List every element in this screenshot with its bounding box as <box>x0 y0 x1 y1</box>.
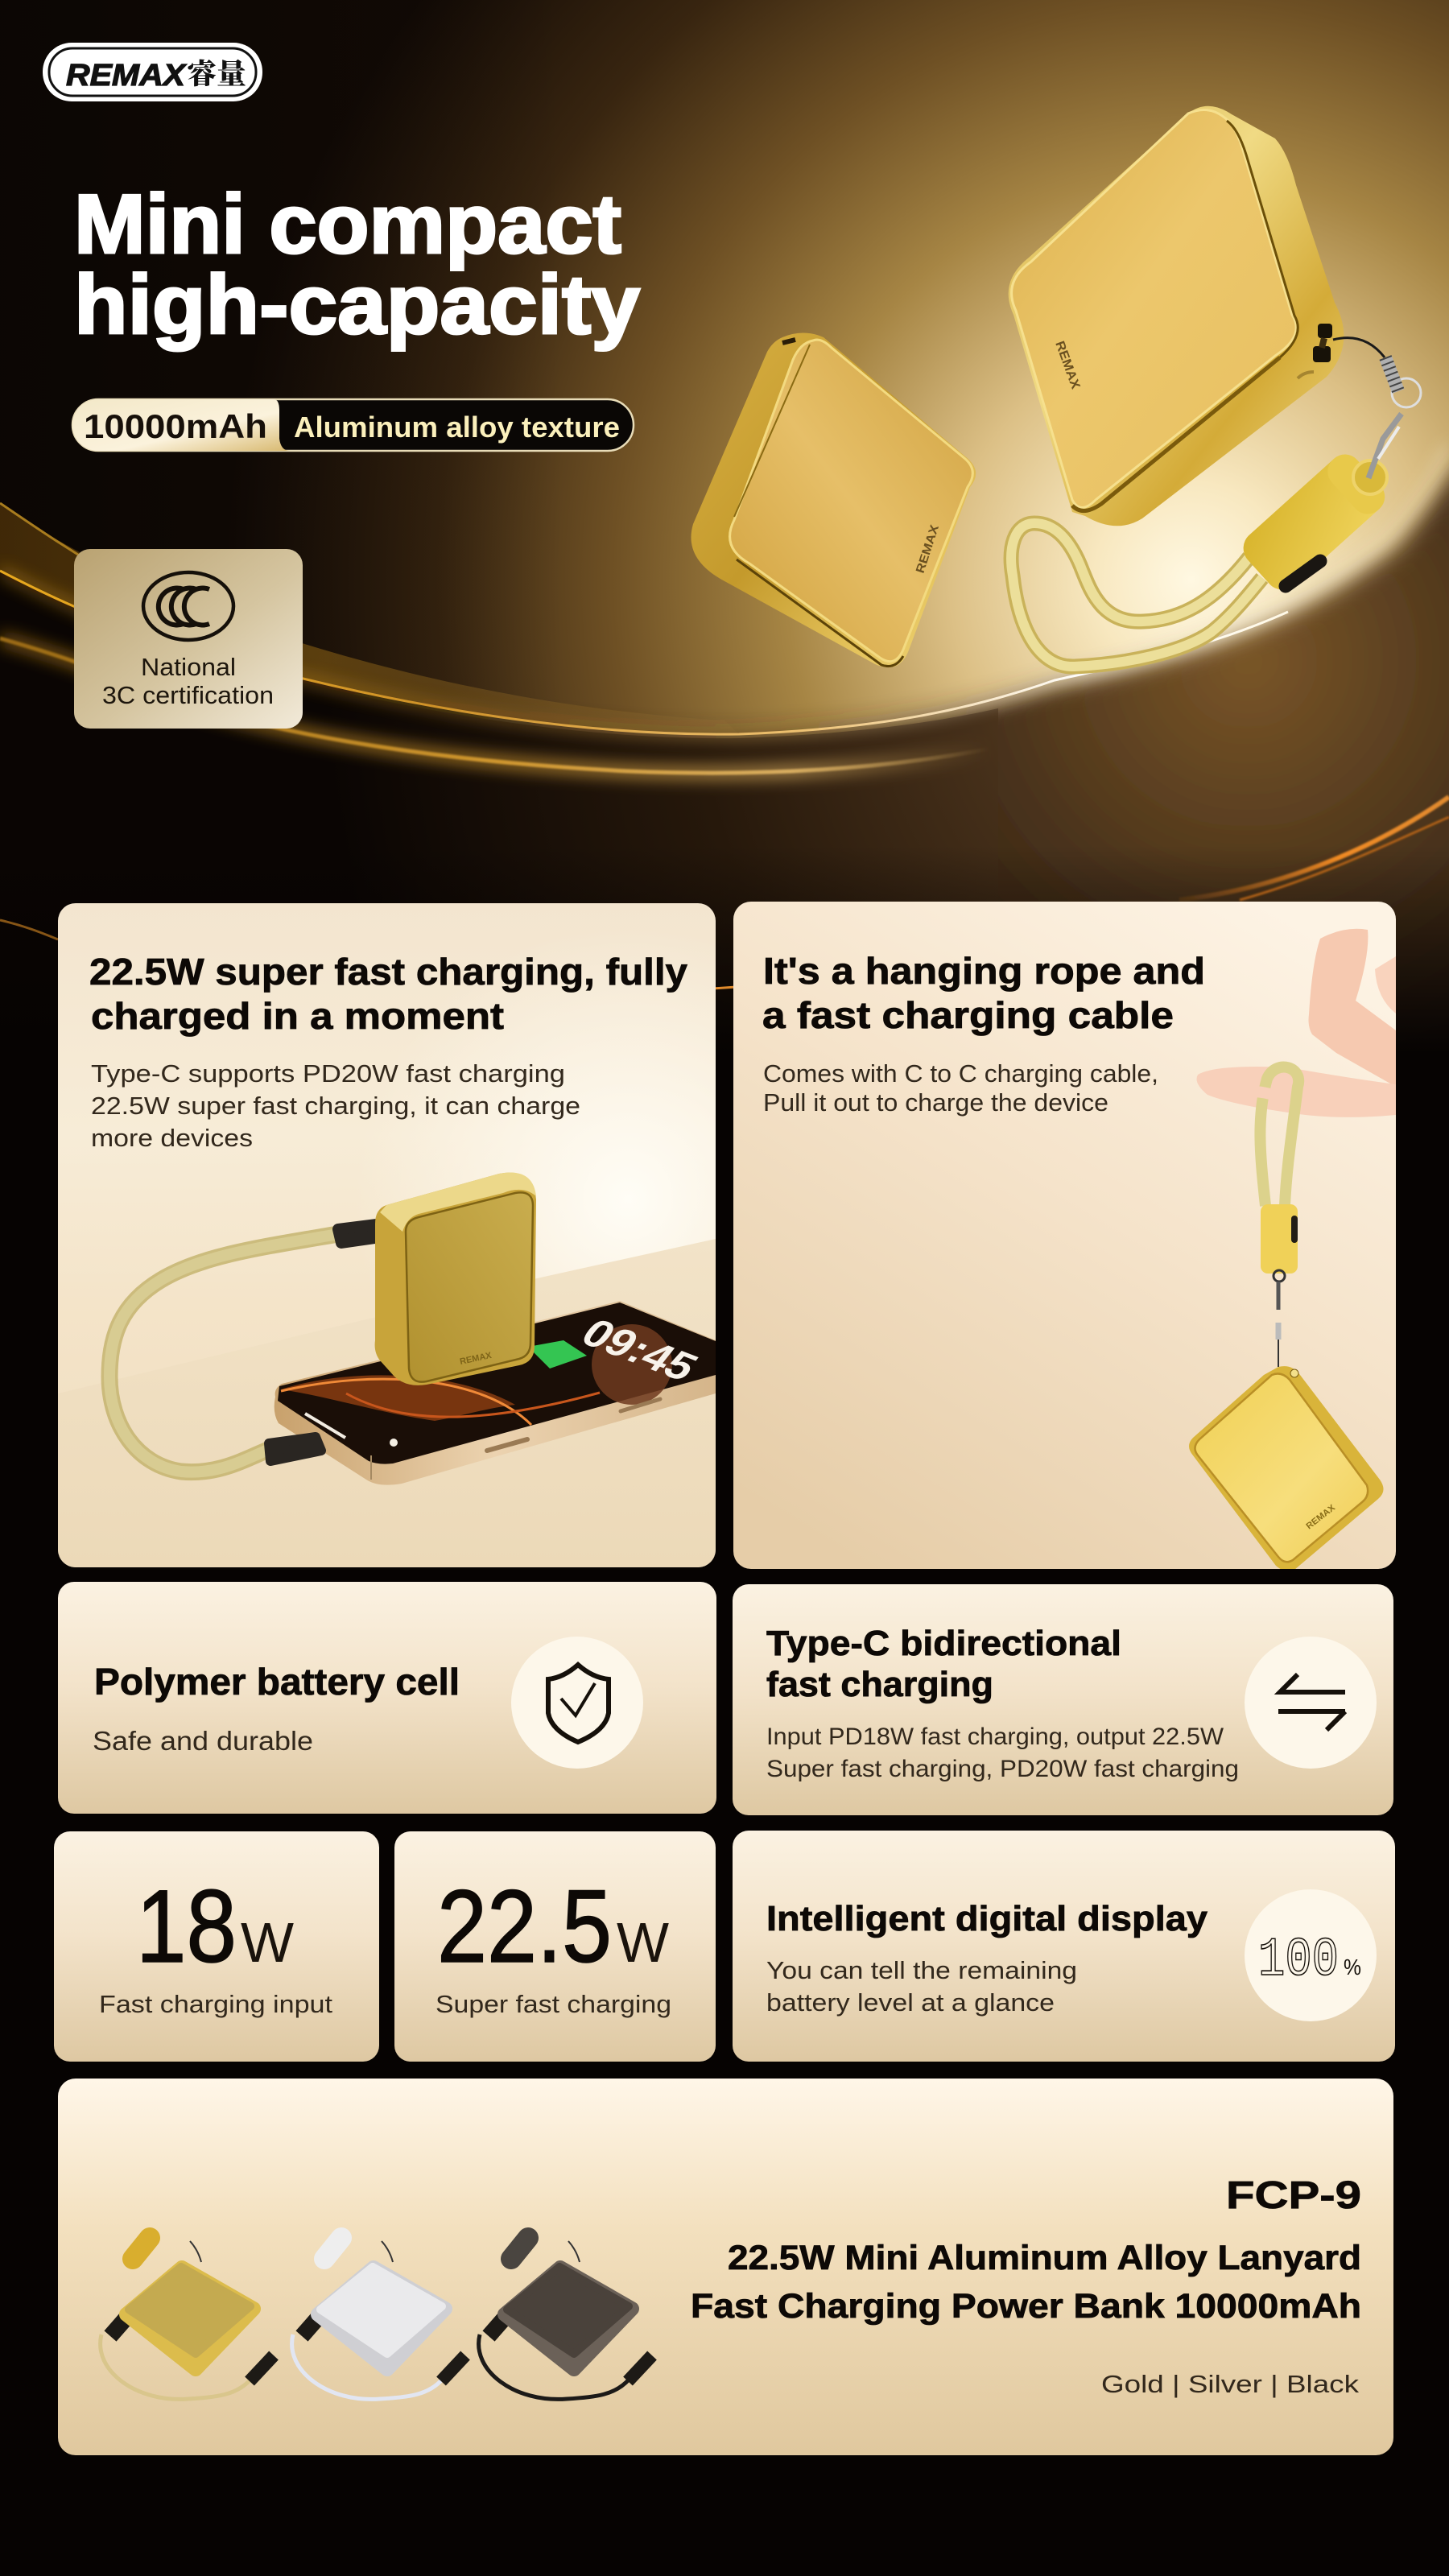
panel: 22.5W output: 22.5 <box>437 1869 612 1984</box>
panel: hanging rope and cable: Pull it out to charge the device <box>763 1088 1108 1117</box>
panel: model and colours <box>58 2079 1393 2455</box>
icon: 100 percent display: % <box>1344 1955 1361 1979</box>
panel: 18W input: Fast charging input <box>99 1990 332 2018</box>
light ribbons <box>0 446 1449 989</box>
badge: national 3C certification: 3C certification <box>102 681 274 709</box>
panel: polymer battery cell: Polymer battery cell <box>94 1661 460 1703</box>
panel: type-C bidirectional <box>733 1584 1393 1815</box>
hand <box>1196 929 1396 1117</box>
panel: 18W input: 18 <box>136 1869 237 1984</box>
panel: 18W input: W <box>241 1911 294 1974</box>
product: silver colourway <box>292 2238 465 2399</box>
lanyard <box>1260 1067 1298 1206</box>
brand mark: REMAX <box>914 523 942 575</box>
panel: polymer battery cell: Safe and durable <box>93 1726 313 1756</box>
product: charging cable lanyard <box>1011 357 1421 667</box>
logo: REMAX <box>43 43 262 101</box>
hanging power bank: REMAX <box>1304 1503 1337 1531</box>
panel: type-C bidirectional: Input PD18W fast charging, output 22.5W <box>766 1724 1224 1750</box>
logo: REMAX: REMAX <box>66 59 188 93</box>
panel: hanging rope and cable <box>733 902 1396 1571</box>
panel: 22.5W output: Super fast charging <box>436 1990 671 2018</box>
logo: REMAX: 睿量 <box>187 52 246 93</box>
panel: 18W input <box>54 1831 379 2062</box>
title: Mini compact <box>74 178 621 271</box>
power bank <box>375 1173 536 1385</box>
panel: polymer battery cell <box>58 1582 716 1814</box>
panel: 22.5W super fast charging: 22.5W super fast charging, it can charge <box>91 1092 580 1120</box>
port <box>782 340 795 343</box>
panel: 22.5W super fast charging: charged in a moment <box>91 995 504 1037</box>
panel: type-C bidirectional: Super fast charging, PD20W fast charging <box>766 1756 1239 1782</box>
icon: 100 percent display <box>1245 1889 1377 2021</box>
badge: national 3C certification <box>74 549 303 729</box>
power bank: REMAX <box>459 1351 493 1367</box>
phone clock: 09:45 <box>572 1311 707 1389</box>
panel: model and colours: 22.5W Mini Aluminum Alloy Lanyard <box>728 2239 1361 2277</box>
panel: type-C bidirectional: Type-C bidirectional <box>766 1624 1121 1663</box>
panel: 22.5W super fast charging <box>58 903 716 1567</box>
panel: intelligent digital display <box>733 1831 1395 2062</box>
capacity and material pill: 10000mAh <box>84 407 267 445</box>
icon: bidirectional arrows <box>1245 1637 1377 1769</box>
panel: intelligent digital display: You can tell the remaining <box>766 1956 1077 1984</box>
panel: model and colours: Fast Charging Power Bank 10000mAh <box>691 2287 1361 2326</box>
panel: hanging rope and cable: It's a hanging rope and <box>763 950 1205 992</box>
product: large power bank <box>1009 106 1385 526</box>
panel: intelligent digital display: battery level at a glance <box>766 1988 1055 2017</box>
panel: model and colours: Gold | Silver | Black <box>1101 2370 1360 2398</box>
illustration: hand holding lanyard <box>1189 929 1396 1571</box>
product: small power bank <box>691 333 976 667</box>
icon: shield with check <box>511 1637 643 1769</box>
connector: top <box>338 1222 398 1243</box>
illustration: power bank charging phone <box>58 997 716 1567</box>
panel: 22.5W super fast charging: 22.5W super fast charging, fully <box>89 951 687 993</box>
phone <box>275 1301 716 1485</box>
panel: intelligent digital display: Intelligent digital display <box>766 1899 1208 1938</box>
panel: 22.5W output: W <box>617 1911 669 1974</box>
panel: 22.5W output <box>394 1831 716 2062</box>
panel: 22.5W super fast charging: more devices <box>91 1124 253 1152</box>
capacity and material pill <box>72 399 634 451</box>
badge: national 3C certification: National <box>141 653 236 681</box>
connector: bottom <box>269 1437 321 1461</box>
retractable cable <box>109 1234 338 1472</box>
title: high-capacity <box>74 258 640 352</box>
panel: type-C bidirectional: fast charging <box>766 1665 993 1704</box>
icon: 100 percent display: 100 <box>1258 1930 1339 1992</box>
hanging power bank <box>1189 1366 1384 1571</box>
capacity and material pill: Aluminum alloy texture <box>294 411 620 444</box>
product: black colourway <box>479 2238 652 2399</box>
panel: 22.5W super fast charging: Type-C supports PD20W fast charging <box>91 1059 565 1088</box>
ports and wire <box>1298 324 1385 378</box>
icon: CCC mark <box>143 572 233 640</box>
product: gold colourway <box>101 2238 274 2399</box>
title <box>74 178 640 352</box>
panel: hanging rope and cable: Comes with C to C charging cable, <box>763 1059 1158 1088</box>
product: large power bank: REMAX <box>1052 340 1083 391</box>
panel: model and colours: FCP-9 <box>1226 2174 1361 2217</box>
panel: hanging rope and cable: a fast charging cable <box>762 994 1174 1036</box>
